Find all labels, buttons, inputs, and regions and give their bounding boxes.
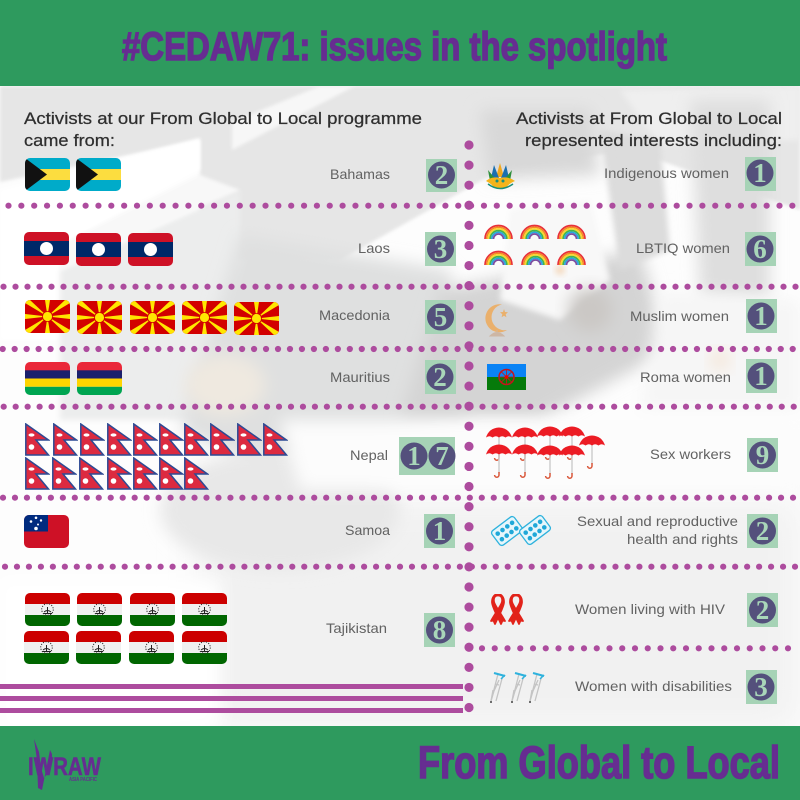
row: Indigenous women: [486, 157, 776, 191]
triple stripes: [0, 684, 463, 713]
row: Nepal: Nepal: [350, 447, 388, 463]
heading: countries: [24, 109, 422, 150]
row: Roma women: Roma women: [640, 369, 731, 385]
row: Indigenous women: Indigenous women: [604, 165, 729, 181]
row: Nepal: 1: [407, 441, 421, 471]
row: Tajikistan: Tajikistan: [326, 620, 387, 636]
row: Bahamas: Bahamas: [330, 166, 390, 182]
row: Women with disabilities: 3: [754, 672, 768, 702]
row: Bahamas: [25, 158, 457, 192]
row: Women living with HIV: 2: [756, 595, 769, 625]
row: Women with disabilities: [490, 670, 777, 704]
title: #CEDAW71: issues in the spotlight: [122, 25, 667, 69]
row: Women living with HIV: Women living with HIV: [575, 601, 726, 617]
row: Mauritius: 2: [433, 362, 447, 392]
IWRAW logo: ASIA PACIFIC: [69, 777, 97, 783]
icon: Roma flag: [487, 364, 526, 390]
row: Nepal: [26, 424, 456, 489]
heading: interests: Activists at From Global to Local: [516, 109, 782, 128]
row: Sexual and reproductive health and rights: Sexual and reproductive: [577, 513, 738, 529]
row: Sexual and reproductive health and rights: 2: [756, 516, 769, 546]
row: Roma women: [487, 359, 777, 393]
dotted dividers: [3, 145, 800, 710]
row: LBTIQ women: [485, 226, 776, 266]
row: LBTIQ women: 6: [753, 234, 767, 264]
row: Macedonia: 5: [434, 302, 447, 332]
IWRAW logo: [28, 739, 101, 790]
row: Muslim women: [485, 299, 777, 336]
row: Laos: Laos: [358, 240, 390, 256]
heading: interests: represented interests including:: [525, 131, 782, 150]
row: Samoa: [24, 514, 455, 548]
row: Muslim women: 1: [754, 301, 768, 331]
row: Muslim women: Muslim women: [630, 308, 729, 324]
row: Mauritius: Mauritius: [330, 369, 390, 385]
row: Tajikistan: 8: [433, 615, 446, 645]
row: Macedonia: Macedonia: [319, 307, 390, 323]
row: Nepal: 7: [435, 441, 449, 471]
row: Sex workers: 9: [756, 440, 769, 470]
row: Bahamas: 2: [435, 160, 448, 190]
row: Indigenous women: 1: [753, 158, 767, 188]
bottom banner: [0, 726, 800, 800]
row: Macedonia: [25, 300, 456, 335]
row: Laos: [24, 232, 456, 266]
row: Samoa: 1: [433, 516, 446, 546]
row: Tajikistan: [24, 593, 455, 664]
heading: interests: [516, 109, 782, 150]
heading: countries: came from:: [24, 131, 115, 150]
IWRAW logo: IWRAW: [28, 753, 101, 781]
heading: countries: Activists at our From Global to Local programme: [24, 109, 422, 128]
row: Laos: 3: [434, 234, 447, 264]
icon: crescent and star: [485, 304, 508, 336]
row: Mauritius: [25, 360, 456, 395]
row: Roma women: 1: [754, 361, 768, 391]
row: Sexual and reproductive health and rights: health and rights: [627, 531, 738, 547]
icon: feather headdress: [486, 163, 515, 188]
top banner: [0, 0, 800, 86]
row: Women with disabilities: Women with disabilities: [575, 678, 732, 694]
row: Sex workers: [486, 426, 778, 478]
row: LBTIQ women: LBTIQ women: [636, 240, 730, 256]
row: Sex workers: Sex workers: [650, 446, 731, 462]
row: Samoa: Samoa: [345, 522, 390, 538]
row: Sexual and reproductive health and rights: [490, 513, 778, 548]
row: Women living with HIV: [491, 593, 778, 627]
